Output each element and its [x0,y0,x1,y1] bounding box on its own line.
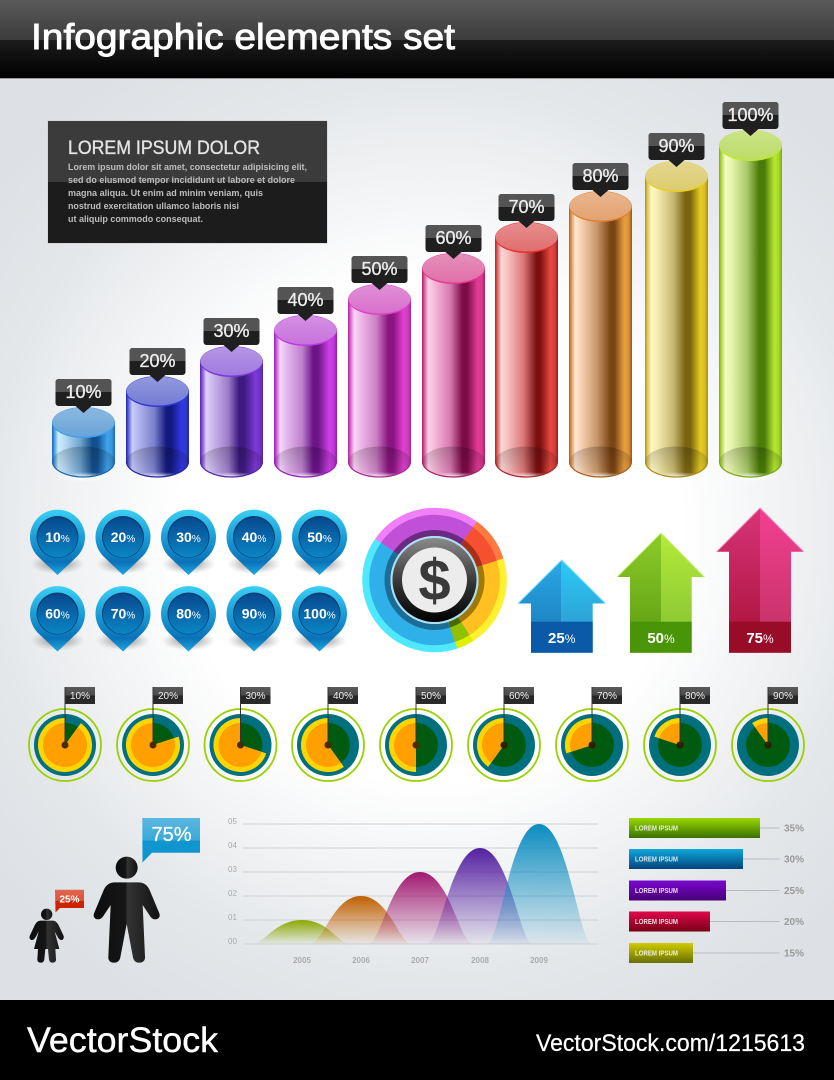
footer bar [0,1000,834,1080]
gauge 60%: 60% [509,691,529,702]
arrow 75% [717,508,804,653]
cylinder 90% [645,133,708,482]
panel: lorem ipsum text box: magna aliqua. Ut enim ad minim veniam, quis [68,188,263,199]
pin 100% [292,586,347,652]
callout: 75%: 75% [151,824,192,846]
dollar sign: $ [418,548,451,613]
panel: lorem ipsum text box: sed do eiusmod tempor incididunt ut labore et dolore [68,175,295,186]
bar 30% [629,849,804,869]
icon: large person [94,857,160,963]
header bar [0,0,834,79]
area 2005 [252,920,350,944]
pin 20%: 20% [111,529,135,545]
pin 50% [292,510,347,575]
gauge 60% [468,687,540,781]
pin 60%: 60% [45,606,70,622]
y axis labels: 01 [228,913,237,922]
y axis labels: 05 [228,817,237,826]
bar 20%: LOREM IPSUM [635,919,678,926]
cylinder 40%: 40% [287,290,324,310]
gauge 30%: 30% [245,691,266,702]
x axis labels: 2006 [352,956,370,965]
pin 60% [30,586,85,652]
y axis labels: 03 [228,865,237,874]
gauge 40% [292,687,364,781]
pin 40% [226,510,282,575]
callout: 25%: 25% [59,894,80,906]
y axis labels [228,817,237,946]
x axis labels: 2007 [411,956,429,965]
y axis labels: 00 [228,937,237,946]
gauge 10% [29,687,101,781]
pin 50%: 50% [307,529,332,545]
arrow 50% [617,533,704,653]
pin 90%: 90% [242,606,266,622]
x axis labels: 2008 [471,956,489,965]
cylinder 30%: 30% [213,321,250,341]
pin 40%: 40% [242,529,266,545]
arrow 50%: 50% [647,630,675,647]
area chart [228,817,598,965]
cylinder 20%: 20% [139,351,176,371]
pin 10% [30,510,85,575]
area 2007 [368,872,473,944]
cylinder 90%: 90% [658,136,695,156]
horizontal bar list [629,818,804,963]
bar 35%: 35% [784,824,804,834]
gauge 20%: 20% [158,691,178,702]
bar 20% [629,912,804,932]
gauge 10%: 10% [70,691,90,702]
pin 80% [161,586,216,652]
cylinder 10%: 10% [65,382,102,402]
arrow 75%: 75% [746,630,774,647]
gauge 80% [644,687,716,781]
bar 35% [629,818,804,838]
dollar donut chart [339,484,530,676]
gauge 30% [204,687,276,781]
pin 30% [161,510,216,575]
bar 25%: LOREM IPSUM [635,888,678,895]
panel: lorem ipsum text box: Lorem ipsum dolor sit amet, consectetur adipisicing elit, [68,162,307,173]
bar 20%: 20% [784,917,804,928]
flag pie gauges [29,687,804,781]
cylinder 40% [274,287,337,482]
callout: 25% [55,890,84,912]
panel: lorem ipsum text box: LOREM IPSUM DOLOR [68,138,260,159]
cylinder 60% [422,225,485,482]
arrow 25% [518,560,606,653]
cylinder 80%: 80% [582,166,619,186]
x axis labels: 2009 [530,956,548,965]
bar 30%: 30% [784,854,804,866]
pin 20% [96,510,150,575]
pin 10%: 10% [45,529,70,545]
header bar: Infographic elements set [31,16,455,57]
cylinder 30% [200,318,263,482]
gauge 50%: 50% [421,691,441,702]
x axis labels: 2005 [293,956,311,965]
gauge 70% [556,687,628,781]
panel: lorem ipsum text box: nostrud exercitation ullamco laboris nisi [68,201,239,212]
bar 15%: LOREM IPSUM [635,950,678,958]
gauge 90%: 90% [773,691,793,702]
map pin percentage markers [30,510,347,652]
area 2006 [310,896,412,944]
y axis labels: 04 [228,841,237,850]
gauge 70%: 70% [597,691,617,702]
cylinder 70% [495,194,558,482]
bar 35%: LOREM IPSUM [635,826,678,832]
bar 15%: 15% [784,948,804,960]
pin 80%: 80% [176,606,201,622]
cylinder 10% [52,379,115,482]
pin 70% [96,586,150,652]
bar 25%: 25% [784,886,804,897]
pin 100%: 100% [303,606,336,622]
arrow 25%: 25% [548,630,576,647]
panel: lorem ipsum text box: ut aliquip commodo consequat. [68,214,203,225]
cylinder 70%: 70% [508,197,545,217]
cylinder 50%: 50% [361,259,398,279]
pin 30%: 30% [176,529,201,545]
footer bar: VectorStock.com/1215613 [536,1030,805,1057]
pin 90% [226,586,282,652]
bar 30%: LOREM IPSUM [635,856,678,864]
icon: small person [30,909,64,963]
footer bar: VectorStock [27,1021,219,1060]
gauge 90% [732,687,804,781]
bar 15% [629,943,804,963]
cylinder 100%: 100% [727,105,774,125]
gauge 40%: 40% [333,691,353,702]
cylinder 80% [569,163,632,482]
pin 70%: 70% [111,606,135,622]
gauge 50% [380,687,452,781]
cylinder 100% [719,102,782,482]
callout: 75% [142,818,200,862]
x axis labels [293,956,548,965]
panel: lorem ipsum text box [48,120,328,244]
bar 25% [629,880,804,900]
people comparison [30,818,200,963]
cylinder 60%: 60% [435,228,472,248]
cylinder bar chart [52,102,782,482]
y axis labels: 02 [228,889,237,898]
gauge 20% [117,687,189,781]
gauge 80%: 80% [685,691,705,702]
cylinder 50% [348,256,411,482]
cylinder 20% [126,348,189,482]
area 2008 [427,848,533,944]
area 2009 [487,824,592,944]
